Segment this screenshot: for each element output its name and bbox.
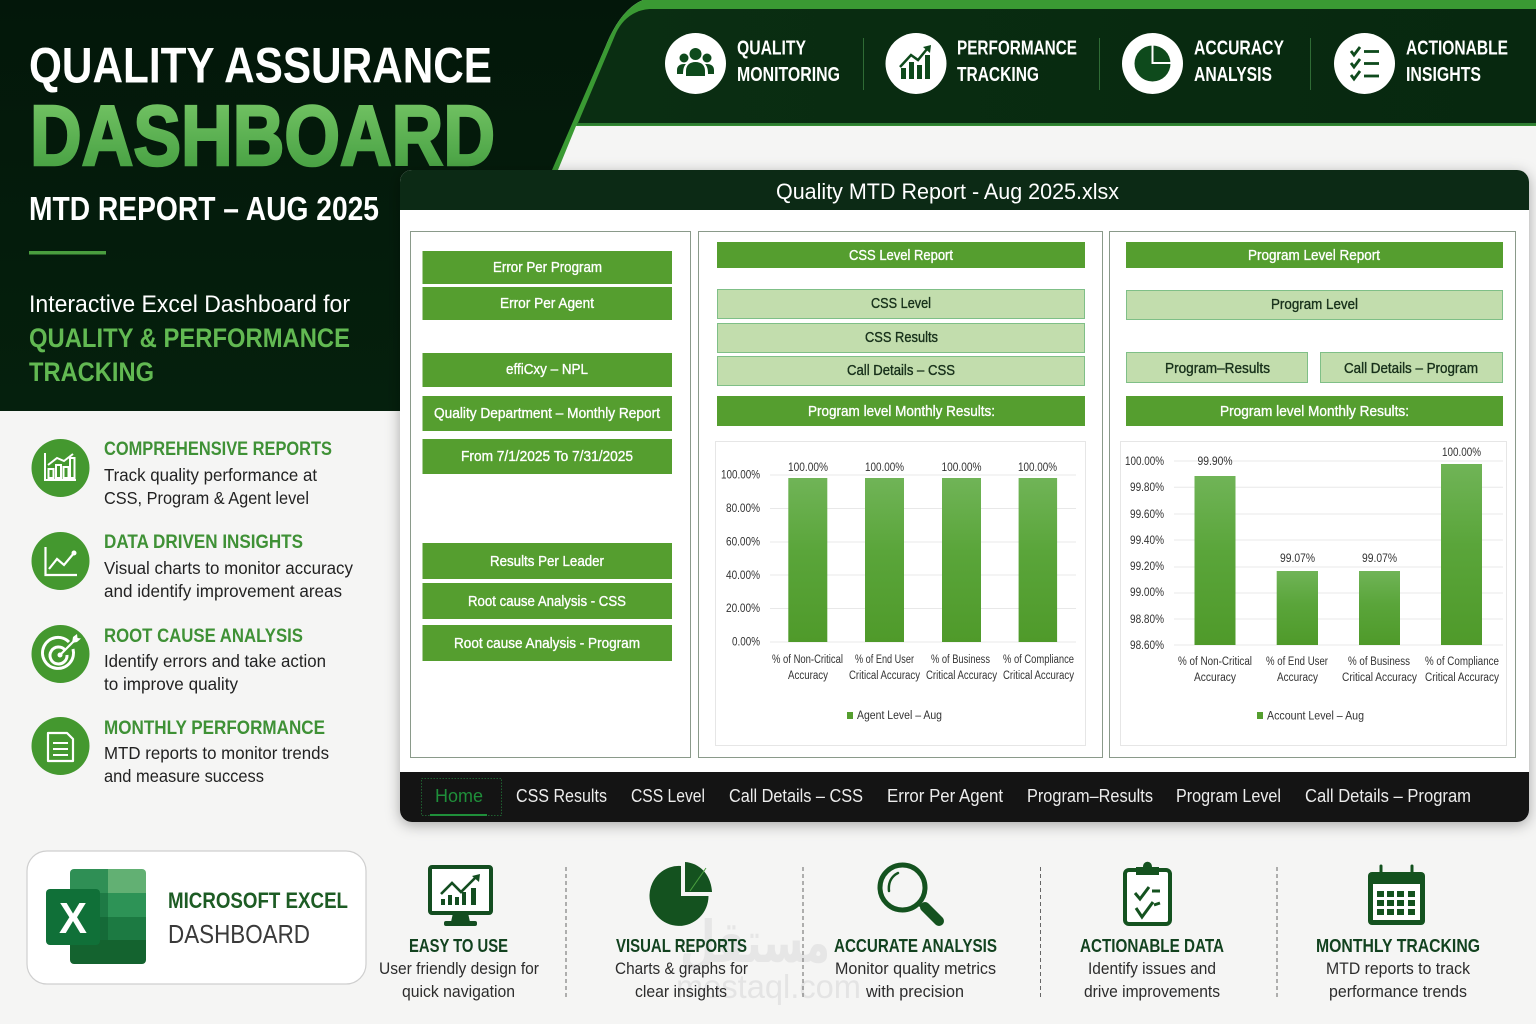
card: microsoft excel [27,851,366,984]
button: date range [422,439,672,474]
value labels: 99.90% [1198,456,1232,468]
title: quality assurance: QUALITY ASSURANCE [29,38,492,94]
y axis labels: 20.00% [726,603,760,615]
window title bar: Quality MTD Report - Aug 2025.xlsx [776,179,1119,204]
button: root cause program: Root cause Analysis - Program [454,636,640,652]
panel: feature list [32,438,353,786]
icon: clipboard checklist [1125,862,1170,924]
category labels: % of Compliance [1425,656,1499,668]
category labels [772,654,1074,682]
feature: accurate analysis: Monitor quality metrics [835,960,996,978]
value labels: 99.07% [1280,553,1315,565]
bar chart: agent level [716,442,1086,746]
value labels [788,462,1057,474]
label: microsoft excel dashboard [168,888,348,949]
feature: monthly tracking: MTD reports to track [1326,960,1471,978]
icon: calendar [1368,866,1425,925]
item: monthly performance: MONTHLY PERFORMANCE [104,717,325,739]
label: performance tracking: PERFORMANCE [957,38,1077,60]
feature: accurate analysis: with precision [865,983,964,1001]
tagline [29,291,350,387]
category labels: % of Business [1348,656,1410,668]
feature: accurate analysis: ACCURATE ANALYSIS [834,936,997,956]
label: performance tracking: TRACKING [957,64,1039,86]
tile: css results: CSS Results [865,330,938,346]
y axis labels: 100.00% [721,470,760,482]
label: accuracy analysis: ANALYSIS [1194,64,1272,86]
button: root cause program [422,625,672,661]
y axis labels: 98.60% [1130,640,1164,652]
sheet tab bar: Program Level [1176,786,1281,806]
feature: monthly tracking [1316,866,1480,1001]
item: monthly performance: MTD reports to monitor trends [104,743,329,763]
y axis labels: 0.00% [732,636,760,648]
feature: actionable data [1080,862,1224,1001]
item: root cause analysis: ROOT CAUSE ANALYSIS [104,625,303,647]
button: efficxy npl: effiCxy – NPL [506,362,588,378]
sheet tab bar: CSS Results [516,786,607,806]
feature: visual reports: clear insights [635,983,727,1001]
title: dashboard: DASHBOARD [30,89,495,184]
category labels: Critical Accuracy [1003,670,1074,682]
sheet tab bar [400,772,1529,822]
category labels: Critical Accuracy [1425,672,1499,684]
panel: program level report [1110,232,1516,758]
y axis labels: 99.20% [1130,561,1164,573]
feature: visual reports: Charts & graphs for [615,960,748,978]
heading: css level report [717,242,1085,268]
sheet tab bar: Error Per Agent [887,786,1003,806]
button: monthly report [422,396,672,431]
item: root cause analysis: Identify errors and take action [104,651,326,671]
item: comprehensive reports [32,438,332,508]
icon: accuracy analysis [1122,33,1183,94]
heading: monthly results [717,396,1085,426]
feature: monthly tracking: performance trends [1329,983,1467,1001]
feature: easy to use: quick navigation [402,983,515,1001]
category labels: Accuracy [1194,672,1236,684]
icon: pie chart [650,862,712,926]
icon: monitor chart [430,867,491,926]
tile: call details css [718,356,1084,386]
legend: Agent Level – Aug [857,710,942,722]
y axis labels: 99.00% [1130,587,1164,599]
icon: magnifier [880,865,939,921]
window title bar [400,170,1529,210]
button: results per leader: Results Per Leader [490,554,604,570]
category labels: % of End User [855,654,914,666]
value labels [1198,447,1481,565]
item: root cause analysis [32,625,326,694]
value labels: 100.00% [865,462,904,474]
y axis labels: 60.00% [726,536,760,548]
header panel: title block [0,0,643,411]
tile: program results: Program–Results [1165,361,1270,377]
bars [1194,464,1482,645]
y axis labels: 99.40% [1130,535,1164,547]
item: comprehensive reports: CSS, Program & Agent level [104,488,309,508]
tagline: QUALITY & PERFORMANCE [29,323,350,353]
label: accuracy analysis [1194,38,1285,86]
category labels: % of End User [1266,656,1328,668]
panel: navigation sheet buttons [410,232,690,758]
label: actionable insights [1406,38,1508,86]
button: results per leader [422,543,672,579]
legend: Account Level – Aug [1267,710,1364,722]
item: data driven insights: DATA DRIVEN INSIGHTS [104,531,303,553]
button: root cause css [422,583,672,619]
feature: monthly tracking: MONTHLY TRACKING [1316,936,1480,956]
tile: css level: CSS Level [871,296,931,312]
header band: feature strip [552,0,1536,170]
feature: actionable data: ACTIONABLE DATA [1080,936,1224,956]
item: data driven insights [32,531,353,601]
button: date range: From 7/1/2025 To 7/31/2025 [461,449,633,465]
label: performance tracking [957,38,1077,86]
value labels: 100.00% [1018,462,1057,474]
tagline: TRACKING [29,357,154,387]
item: monthly performance [32,717,329,786]
category labels: % of Non-Critical [1178,656,1252,668]
heading: program level report: Program Level Report [1248,248,1380,264]
button: error per program [422,251,672,284]
item: comprehensive reports: Track quality performance at [104,465,317,485]
dashed dividers [566,867,1277,997]
sheet tab bar: CSS Level [631,786,705,806]
category labels [1178,656,1499,684]
watermark: مستقل [680,910,830,975]
item: data driven insights: Visual charts to monitor accuracy [104,558,353,578]
value labels: 100.00% [1442,447,1481,459]
heading: css level report: CSS Level Report [849,248,953,264]
heading: monthly results [1126,396,1503,426]
bars [788,478,1057,642]
watermark: mostaql.com [676,968,861,1005]
sheet tab bar: Home [435,786,483,806]
button: monthly report: Quality Department – Monthly Report [434,406,660,422]
item: root cause analysis: to improve quality [104,674,238,694]
tile: css level [718,290,1084,318]
heading: program level report [1126,242,1503,268]
category labels: % of Business [931,654,990,666]
y axis labels: 99.80% [1130,482,1164,494]
label: quality monitoring: MONITORING [737,64,840,86]
feature: visual reports [615,862,748,1001]
icon: excel logo: X [59,894,87,943]
label: microsoft excel dashboard: DASHBOARD [168,919,310,949]
label: actionable insights: INSIGHTS [1406,64,1481,86]
tagline: Interactive Excel Dashboard for [29,291,350,318]
bar chart: account level [1120,442,1506,746]
icon: excel logo [46,869,146,964]
feature: easy to use [379,867,539,1001]
category labels: % of Compliance [1003,654,1074,666]
accent rule [29,251,106,254]
tile: css results [718,324,1084,352]
subtitle: mtd report: MTD REPORT – AUG 2025 [29,191,379,228]
feature: actionable data: drive improvements [1084,983,1220,1001]
category labels: Accuracy [1277,672,1318,684]
button: error per program: Error Per Program [493,260,602,276]
y axis labels: 40.00% [726,570,760,582]
sheet tab bar: Call Details – Program [1305,786,1471,806]
y axis labels: 98.80% [1130,614,1164,626]
icon: quality monitoring [665,33,726,94]
label: microsoft excel dashboard: MICROSOFT EXCEL [168,888,348,913]
panel: css level report [698,232,1102,758]
value labels: 99.07% [1362,553,1397,565]
category labels: Accuracy [788,670,828,682]
y axis labels [1125,456,1164,652]
feature: visual reports: VISUAL REPORTS [616,936,747,956]
y axis labels: 99.60% [1130,509,1164,521]
label: quality monitoring [737,38,840,86]
value labels: 100.00% [942,462,982,474]
item: data driven insights: and identify improvement areas [104,581,342,601]
icon: actionable insights [1334,33,1395,94]
category labels: Critical Accuracy [1342,672,1417,684]
tile: program level [1126,290,1502,320]
category labels: Critical Accuracy [926,670,997,682]
tile: call details css: Call Details – CSS [847,363,955,379]
item: monthly performance: and measure success [104,766,264,786]
value labels: 100.00% [788,462,828,474]
tile: call details program [1320,352,1502,382]
y axis labels: 100.00% [1125,456,1164,468]
icon: performance tracking [886,33,946,94]
feature: actionable data: Identify issues and [1088,960,1216,978]
label: accuracy analysis: ACCURACY [1194,38,1285,60]
button: error per agent: Error Per Agent [500,296,594,312]
y axis labels [721,470,760,648]
tile: program level: Program Level [1271,297,1358,313]
heading: monthly results: Program level Monthly Results: [808,404,995,420]
feature: easy to use: User friendly design for [379,960,539,978]
feature: easy to use: EASY TO USE [409,936,508,956]
sheet tab bar: Call Details – CSS [729,786,863,806]
button: efficxy npl [422,353,672,387]
category labels: Critical Accuracy [849,670,920,682]
label: quality monitoring: QUALITY [737,38,807,60]
label: actionable insights: ACTIONABLE [1406,38,1508,60]
item: comprehensive reports: COMPREHENSIVE REPORTS [104,438,332,460]
window: excel dashboard [400,170,1529,822]
button: root cause css: Root cause Analysis - CSS [468,594,626,610]
feature: accurate analysis [834,865,997,1001]
y axis labels: 80.00% [726,503,760,515]
button: error per agent [422,287,672,320]
category labels: % of Non-Critical [772,654,843,666]
watermark [676,910,861,1005]
sheet tab bar: Program–Results [1027,786,1153,806]
tile: call details program: Call Details – Program [1344,361,1478,377]
tile: program results [1126,352,1308,382]
heading: monthly results: Program level Monthly Results: [1220,404,1409,420]
